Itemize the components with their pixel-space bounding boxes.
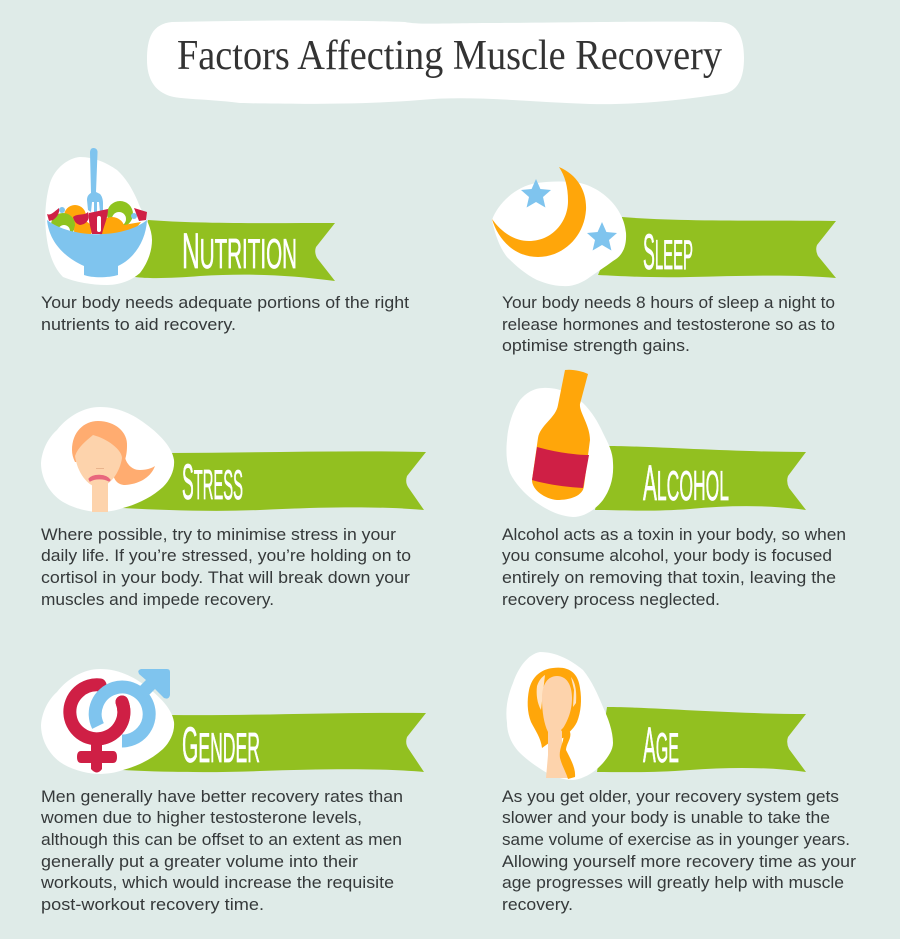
description: age: Allowing yourself more recovery time as your [502,852,856,871]
icon: moon and stars [492,167,626,286]
panel: age [502,652,856,914]
description: stress: muscles and impede recovery. [41,590,274,609]
banner: alcohol: ALCOHOL [643,455,729,511]
description: stress [41,525,411,609]
description: age: same volume of exercise as in younger years. [502,830,850,849]
description: sleep: Your body needs 8 hours of sleep a night to [502,293,835,312]
banner: sleep [598,217,836,280]
description: gender: although this can be offset to an extent as men [41,830,402,849]
description: sleep [502,293,835,355]
description: gender: Men generally have better recovery rates than [41,787,403,806]
description: alcohol: entirely on removing that toxin, leaving the [502,568,836,587]
banner: stress [122,451,426,511]
banner: age: AGE [643,717,679,773]
description: gender: women due to higher testosterone levels, [40,808,362,827]
description: alcohol: recovery process neglected. [502,590,720,609]
panel: alcohol [502,370,846,609]
banner: sleep: SLEEP [643,224,693,280]
description: nutrition: Your body needs adequate portions of the right [41,293,409,312]
banner: alcohol [595,446,806,511]
banner: age [597,707,806,773]
icon: salad bowl [45,148,152,285]
description: nutrition: nutrients to aid recovery. [41,315,236,334]
description: alcohol: Alcohol acts as a toxin in your body, so when [502,525,846,544]
icon: bottle [506,370,613,517]
icon: stressed face [41,407,174,512]
description: gender [40,787,403,914]
description: stress: cortisol in your body. That will break down your [41,568,410,587]
description: stress: daily life. If you’re stressed, you’re holding on to [41,546,411,565]
title: Factors Affecting Muscle Recovery [177,33,722,79]
description: sleep: optimise strength gains. [502,336,690,355]
description: nutrition [41,293,409,334]
description: age: recovery. [502,895,573,914]
description: age: As you get older, your recovery system gets [502,787,839,806]
description: alcohol: you consume alcohol, your body is focused [502,546,832,565]
panel: nutrition [41,148,409,334]
description: sleep: release hormones and testosterone so as to [502,315,835,334]
banner: gender [122,713,426,773]
description: gender: workouts, which would increase the requisite [40,873,394,892]
description: age: age progresses will greatly help with muscle [502,873,844,892]
description: gender: generally put a greater volume into their [41,852,358,871]
icon: woman with long hair [506,652,613,780]
panel: stress [41,407,426,609]
banner: nutrition: NUTRITION [182,223,297,279]
banner: stress: STRESS [182,454,243,510]
banner: gender: GENDER [182,717,260,773]
title [147,20,744,104]
icon: gender symbols [41,669,174,774]
panel: gender [40,669,426,914]
banner: nutrition [135,220,335,281]
description: stress: Where possible, try to minimise stress in your [41,525,396,544]
panel: sleep [492,167,836,355]
description: age [502,787,856,914]
description: age: slower and your body is unable to take the [502,808,830,827]
description: alcohol [502,525,846,609]
description: gender: post-workout recovery time. [41,895,264,914]
